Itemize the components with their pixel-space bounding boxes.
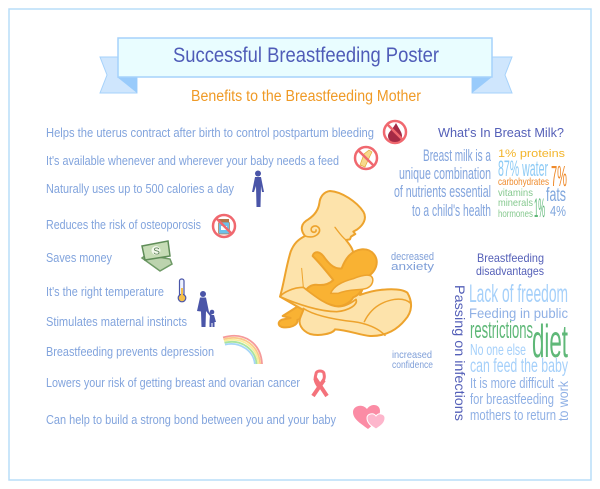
banner left ribbon tail bbox=[100, 57, 137, 93]
banner right fold bbox=[472, 77, 492, 93]
text block: breast milk description bbox=[394, 147, 492, 220]
heading: breastfeeding disadvantages bbox=[476, 251, 544, 278]
icon: awareness ribbon bbox=[313, 371, 327, 396]
word cloud: milk composition: vitamins bbox=[498, 187, 533, 199]
icon: hearts bbox=[353, 405, 385, 429]
poster: 7% bbox=[551, 161, 567, 193]
icon: no blood bbox=[384, 121, 406, 143]
icon: money: S bbox=[153, 246, 160, 258]
icon: mother and child bbox=[197, 291, 216, 327]
icon: thermometer bbox=[178, 279, 186, 302]
word cloud: milk composition: hormones bbox=[498, 208, 533, 220]
word cloud: milk composition: 1% bbox=[534, 193, 545, 223]
label: decreased anxiety: decreased bbox=[391, 251, 434, 263]
baby foot bbox=[279, 306, 305, 327]
word cloud: milk composition bbox=[498, 148, 567, 223]
hair curl bbox=[305, 226, 320, 237]
label: decreased anxiety bbox=[391, 251, 435, 273]
label: increased confidence bbox=[392, 349, 433, 371]
word cloud: disadvantages: No one else bbox=[470, 342, 526, 359]
title: Successful Breastfeeding Poster bbox=[173, 44, 439, 67]
upper arm line bbox=[302, 268, 303, 287]
mother's crossed leg lines bbox=[303, 299, 411, 335]
banner front panel bbox=[118, 38, 492, 77]
benefit: cancer: Lowers your risk of getting breast and ovarian cancer bbox=[46, 375, 301, 390]
benefit: availability: It's available whenever and wherever your baby needs a feed bbox=[46, 153, 339, 168]
benefit: money: Saves money bbox=[46, 250, 112, 265]
benefit: bond: Can help to build a strong bond between you and your baby bbox=[46, 412, 336, 427]
benefit: calories: Naturally uses up to 500 calories a day bbox=[46, 181, 234, 196]
subtitle: Benefits to the Breastfeeding Mother bbox=[191, 88, 421, 105]
text block: breast milk description: Breast milk is a bbox=[423, 147, 492, 165]
word cloud: disadvantages: Passing on infections bbox=[452, 285, 468, 421]
icon: no supplements jar bbox=[213, 215, 235, 237]
face line bbox=[335, 227, 346, 240]
icon: no bottle bbox=[355, 147, 377, 169]
word cloud: disadvantages: mothers to return bbox=[470, 407, 556, 424]
benefit: depression: Breastfeeding prevents depression bbox=[46, 344, 214, 359]
benefit: instincts: Stimulates maternal instincts bbox=[46, 314, 187, 329]
heading: what's in breast milk: What's In Breast Milk? bbox=[438, 125, 564, 140]
baby bbox=[304, 249, 377, 306]
word cloud: milk composition: 4% bbox=[550, 203, 566, 220]
icon: rainbow bbox=[223, 336, 262, 364]
word cloud: disadvantages bbox=[452, 280, 571, 424]
label: decreased anxiety: anxiety bbox=[391, 261, 435, 273]
benefit: temperature: It's the right temperature bbox=[46, 284, 164, 299]
title banner bbox=[100, 38, 512, 93]
word cloud: disadvantages: It is more difficult bbox=[470, 375, 555, 392]
banner right ribbon tail bbox=[472, 57, 512, 93]
word cloud: milk composition: 1% proteins bbox=[498, 148, 566, 160]
word cloud: disadvantages: to work bbox=[555, 380, 571, 421]
word cloud: milk composition: carbohydrates bbox=[498, 176, 549, 188]
text block: breast milk description: of nutrients essential bbox=[394, 183, 491, 201]
icon: woman silhouette bbox=[252, 170, 264, 207]
mother's forearm bbox=[280, 287, 356, 312]
text block: breast milk description: unique combination bbox=[399, 165, 491, 183]
banner left fold bbox=[117, 77, 137, 93]
icon: money bbox=[142, 241, 172, 271]
label: increased confidence: confidence bbox=[392, 359, 433, 371]
benefits list bbox=[46, 125, 374, 427]
word cloud: milk composition: fats bbox=[546, 185, 566, 206]
benefit: osteoporosis: Reduces the risk of osteoporosis bbox=[46, 217, 201, 232]
word cloud: disadvantages: restrictions bbox=[470, 317, 533, 344]
benefit: uterus: Helps the uterus contract after birth to control postpartum bleeding bbox=[46, 125, 374, 140]
illustration: mother and baby bbox=[279, 191, 411, 336]
heading: breastfeeding disadvantages: Breastfeeding bbox=[477, 251, 544, 265]
word cloud: disadvantages: Feeding in public bbox=[469, 305, 568, 321]
text block: breast milk description: to a child's health bbox=[412, 202, 491, 220]
heading: breastfeeding disadvantages: disadvantages bbox=[476, 264, 544, 278]
word cloud: disadvantages: for breastfeeding bbox=[470, 391, 554, 408]
word cloud: milk composition: 87% water bbox=[498, 156, 548, 181]
word cloud: milk composition: minerals bbox=[498, 197, 533, 209]
label: increased confidence: increased bbox=[392, 349, 432, 361]
mother's body bbox=[280, 191, 411, 336]
mother's hand bbox=[331, 275, 373, 293]
